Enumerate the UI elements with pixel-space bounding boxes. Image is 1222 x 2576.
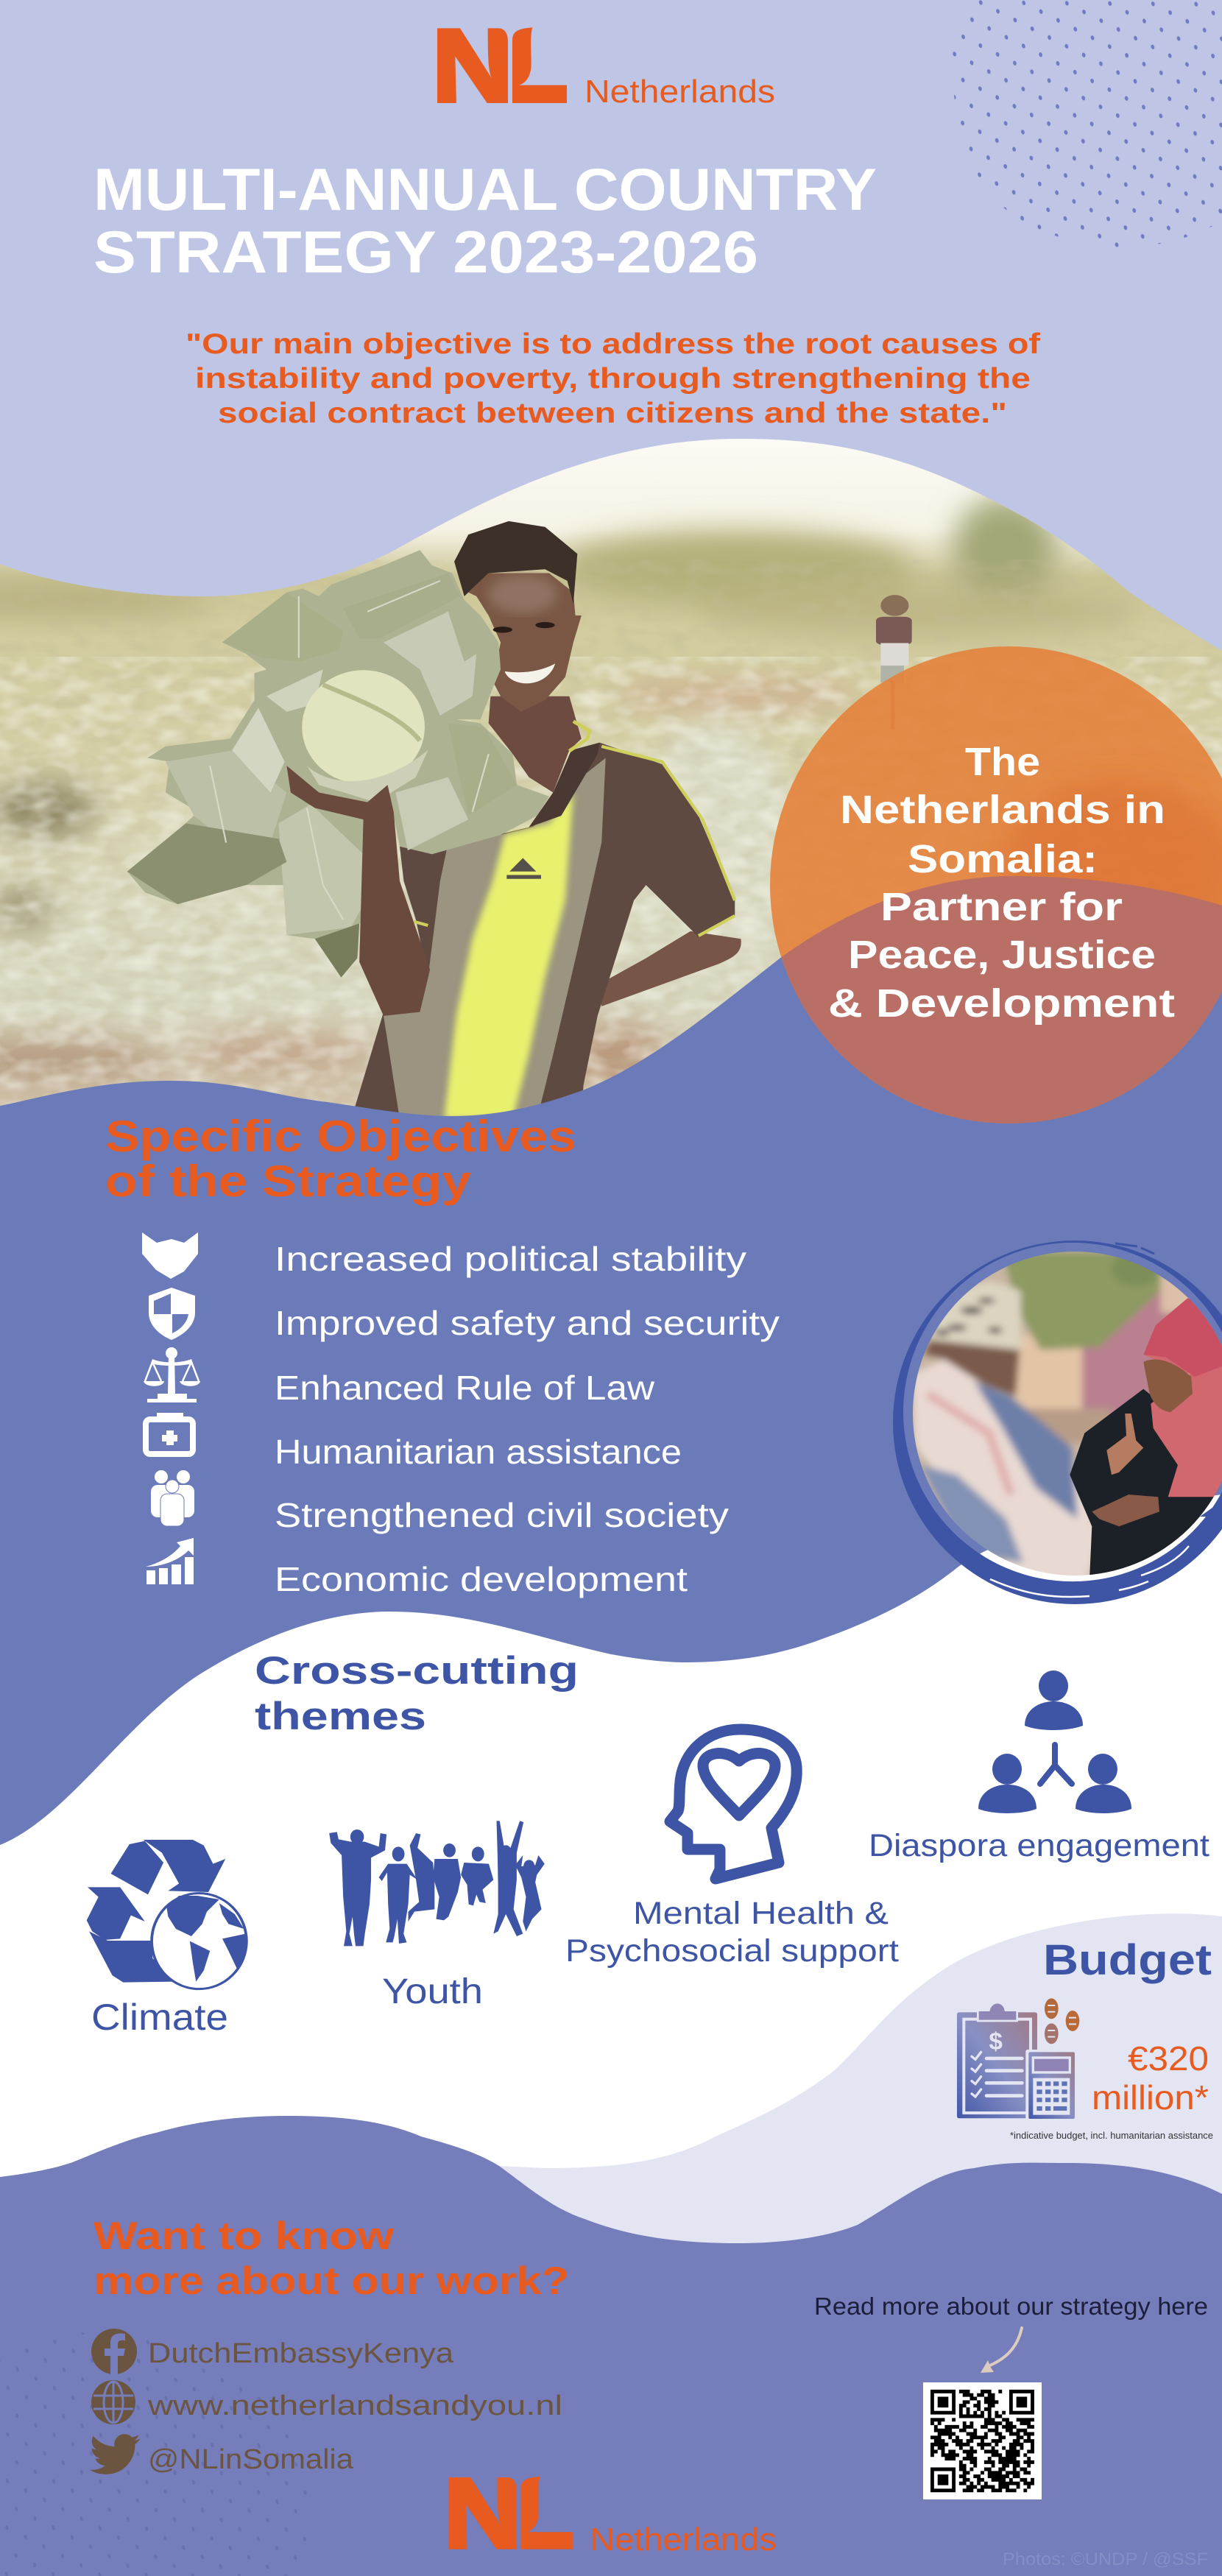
icon: jumping youth [329,1821,545,1946]
title [93,157,877,286]
logo: NL Netherlands bottom: Netherlands [590,2522,777,2558]
brush strokes [964,1546,1189,1597]
photo: women in conversation with brush ring [869,1222,1222,1620]
objective 6: Economic development [275,1560,688,1598]
arrow to QR code [981,2328,1022,2373]
heading: cross-cutting themes [255,1649,579,1738]
icon: recycle globe [87,1840,247,1989]
collar [529,743,599,828]
blurred background and man [869,1222,1222,1620]
icon: shield [149,1288,195,1340]
panel: white cross-cutting background [0,1495,1222,2209]
brush ring [893,1241,1222,1604]
callout circle: Netherlands in Somalia: Somalia: [908,837,1098,881]
quote: "Our main objective is to address the root causes of [186,328,1041,360]
decorative dot pattern bottom left [0,2332,311,2576]
photo credit: Photos: ©UNDP / @SSF [1003,2549,1208,2569]
label: mental health: Mental Health & [633,1896,889,1931]
amount [1092,2039,1209,2117]
icon: connected people [978,1670,1131,1813]
title: STRATEGY 2023-2026 [93,219,758,286]
heading: specific objectives: Specific Objectives [105,1112,576,1161]
callout circle: Netherlands in Somalia: Peace, Justice [848,933,1156,977]
face [468,573,582,712]
panel: budget background [499,1913,1222,2282]
background figure [876,595,912,730]
eyes [493,627,512,633]
face [1143,1360,1193,1412]
panel: contact footer background [0,2116,1222,2576]
theme: mental health: Psychosocial support [565,1933,899,1969]
contact list [90,2329,562,2475]
cabbage head [302,670,425,784]
theme: youth [329,1821,545,2011]
objective 3: Enhanced Rule of Law [275,1369,655,1407]
objective 4: Humanitarian assistance [275,1433,682,1471]
icon: clipboard and calculator [957,1998,1079,2120]
logo: NL Netherlands bottom [448,2477,777,2558]
amount: million* [1092,2078,1209,2117]
farmer traced figure [127,521,741,1119]
theme: diaspora [869,1670,1209,1863]
panel: specific objectives background [0,876,1222,1914]
callout circle: Netherlands in Somalia [766,646,1222,1134]
decorative dot pattern top right [953,0,1222,247]
shirt badge [506,858,541,879]
hijab [1143,1298,1222,1497]
smile [505,663,555,683]
woman's body [1070,1389,1222,1581]
icon: people [151,1470,194,1526]
cabbage outer leaves [127,550,549,978]
heading: want to know more [93,2215,569,2303]
label: youth: Youth [382,1972,483,2011]
callout circle: Netherlands in Somalia: & Development [828,981,1175,1026]
heading: cross-cutting themes: Cross-cutting [255,1649,579,1693]
heading: specific objectives [105,1112,576,1206]
footnote: *indicative budget, incl. humanitarian assistance [1010,2131,1213,2141]
quote [186,328,1041,429]
shirt [351,743,735,1119]
heading: specific objectives: of the Strategy [105,1157,472,1206]
heading: want to know more: more about our work? [93,2259,569,2303]
heading: budget: Budget [1043,1936,1212,1984]
objective 1: Increased political stability [275,1240,746,1278]
icon: head with heart [670,1729,797,1879]
icon: globe [91,2380,135,2424]
raised hand [1106,1414,1143,1475]
quote: social contract between citizens and the state." [218,398,1007,429]
raised arm [286,766,430,1016]
neck [489,696,582,793]
quote: instability and poverty, through strengthening the [195,363,1031,395]
objectives list [142,1232,780,1598]
heading: want to know more: Want to know [93,2215,395,2258]
icon: twitter bird [90,2434,140,2474]
label: diaspora: Diaspora engagement [869,1828,1209,1863]
callout circle: Netherlands in Somalia: The [965,740,1040,784]
title: MULTI-ANNUAL COUNTRY [93,157,877,223]
leaves around cabbage head [307,750,428,802]
logo: NL Netherlands top [437,27,775,110]
callout circle: Netherlands in Somalia: Netherlands in [840,788,1165,832]
icon: clipboard and calculator: $ [989,2028,1003,2055]
sleeve stripe [414,747,735,936]
amount: €320 [1128,2039,1209,2078]
logo: NL Netherlands top: Netherlands [584,74,775,110]
QR code [923,2382,1042,2499]
contact: twitter: @NLinSomalia [148,2444,354,2475]
objective 2: Improved safety and security [275,1304,780,1342]
shirt halftone stripe [384,758,606,1119]
photo: farmer holding cabbage [0,439,1222,1134]
QR call to action text: Read more about our strategy here [814,2293,1208,2320]
icon: medical kit [146,1415,193,1454]
icon: growth chart [146,1538,194,1584]
back arm [598,931,741,1006]
icon: handshake [142,1232,198,1279]
contact: website: www.netherlandsandyou.nl [147,2390,562,2421]
shirt yellow stripe [444,793,573,1119]
hair [454,521,577,604]
contact: facebook: DutchEmbassyKenya [148,2338,454,2369]
icon: facebook [91,2329,137,2374]
callout circle: Netherlands in Somalia: Partner for [880,885,1123,929]
label: climate: Climate [91,1997,228,2038]
theme: climate [87,1840,247,2038]
budget block [957,1936,1213,2141]
heading: cross-cutting themes: themes [255,1695,426,1738]
objective 5: Strengthened civil society [275,1496,729,1534]
theme: mental health [565,1729,899,1969]
lower hand [1092,1495,1159,1526]
icon: scales [144,1347,200,1402]
